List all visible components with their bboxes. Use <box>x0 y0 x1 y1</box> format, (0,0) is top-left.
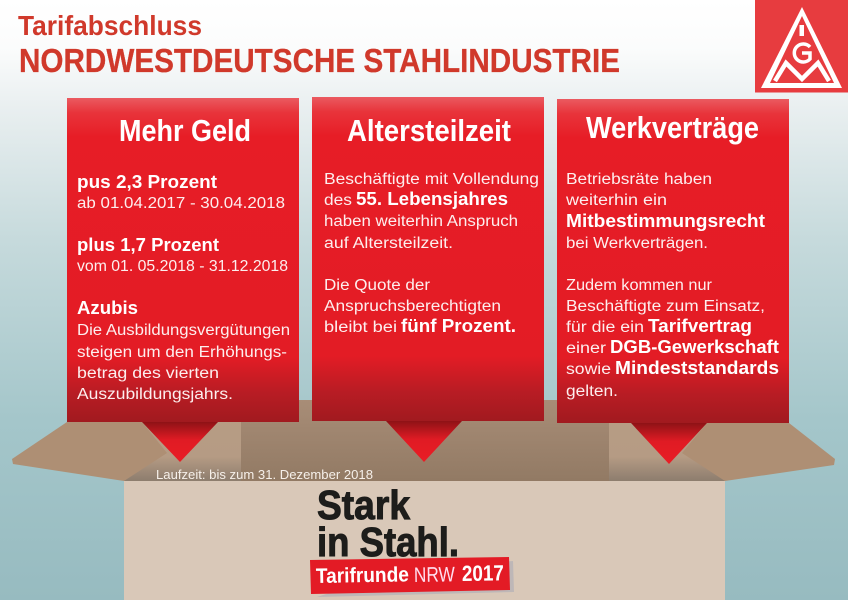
panel: Mehr Geld: Mehr Geld <box>119 113 251 148</box>
panel: Altersteilzeit: des <box>324 192 352 209</box>
panel: Mehr Geld: vom 01. 05.2018 - 31.12.2018 <box>77 258 288 275</box>
pointer <box>386 421 462 462</box>
pointer <box>631 423 707 464</box>
panel: Werkverträge: sowie <box>566 361 611 378</box>
panel: Werkverträge: DGB-Gewerkschaft <box>610 337 779 357</box>
banner: NRW <box>414 563 455 587</box>
panel: Werkverträge: für die ein <box>566 319 644 336</box>
panel: Altersteilzeit: auf Altersteilzeit. <box>324 235 453 252</box>
panel: Werkverträge: Mitbestimmungsrecht <box>566 211 765 231</box>
panel: Werkverträge: Mindeststandards <box>615 358 779 378</box>
banner: 2017 <box>462 560 504 586</box>
panel: Werkverträge: Werkverträge <box>586 110 759 145</box>
campaign slogan <box>310 482 514 597</box>
campaign slogan: Stark <box>317 482 410 528</box>
panel: Altersteilzeit <box>312 97 544 462</box>
icon: IG Metall logo <box>755 0 848 92</box>
panel: Mehr Geld <box>67 98 299 462</box>
panel: Werkverträge: gelten. <box>566 383 618 400</box>
panel: Altersteilzeit: bleibt bei <box>324 319 397 336</box>
panel: Werkverträge: einer <box>566 340 606 357</box>
panel: Mehr Geld: plus 1,7 Prozent <box>77 235 219 255</box>
panel: Altersteilzeit: haben weiterhin Anspruch <box>324 213 518 230</box>
term note: Laufzeit: bis zum 31. Dezember 2018 <box>156 468 373 482</box>
title: NORDWESTDEUTSCHE STAHLINDUSTRIE <box>19 42 620 79</box>
panel: Altersteilzeit: Altersteilzeit <box>347 113 511 148</box>
banner: Tarifrunde <box>316 563 409 588</box>
panel: Altersteilzeit: fünf Prozent. <box>401 316 516 336</box>
panel: Mehr Geld: ab 01.04.2017 - 30.04.2018 <box>77 195 285 212</box>
banner shadow <box>317 561 514 597</box>
panel: Mehr Geld: Auszubildungsjahrs. <box>77 386 233 403</box>
panel: Mehr Geld: Die Ausbildungsvergütungen <box>77 322 290 339</box>
panel: Werkverträge: Betriebsräte haben <box>566 171 712 188</box>
panel: Werkverträge: Beschäftigte zum Einsatz, <box>566 298 765 315</box>
banner <box>310 557 510 594</box>
panel: Werkverträge: Tarifvertrag <box>648 316 752 336</box>
pointer <box>142 422 218 462</box>
cardboard box <box>12 400 835 600</box>
campaign slogan: in Stahl. <box>317 519 459 565</box>
panel: Altersteilzeit: Beschäftigte mit Vollendung <box>324 171 539 188</box>
panel: Altersteilzeit: Anspruchsberechtigten <box>324 298 501 315</box>
title: Tarifabschluss <box>18 10 202 41</box>
panel: Mehr Geld: betrag des vierten <box>77 365 219 382</box>
panel: Mehr Geld: steigen um den Erhöhungs- <box>77 344 287 361</box>
panel: Werkverträge <box>557 99 789 464</box>
panel: Mehr Geld: Azubis <box>77 298 138 318</box>
title <box>18 10 620 79</box>
panel: Werkverträge: weiterhin ein <box>565 192 667 209</box>
panel: Mehr Geld: pus 2,3 Prozent <box>77 172 217 192</box>
panel: Werkverträge: bei Werkverträgen. <box>566 235 708 252</box>
panel: Altersteilzeit: Die Quote der <box>324 277 430 294</box>
panel: Werkverträge: Zudem kommen nur <box>566 277 712 294</box>
panel: Altersteilzeit: 55. Lebensjahres <box>356 189 508 209</box>
